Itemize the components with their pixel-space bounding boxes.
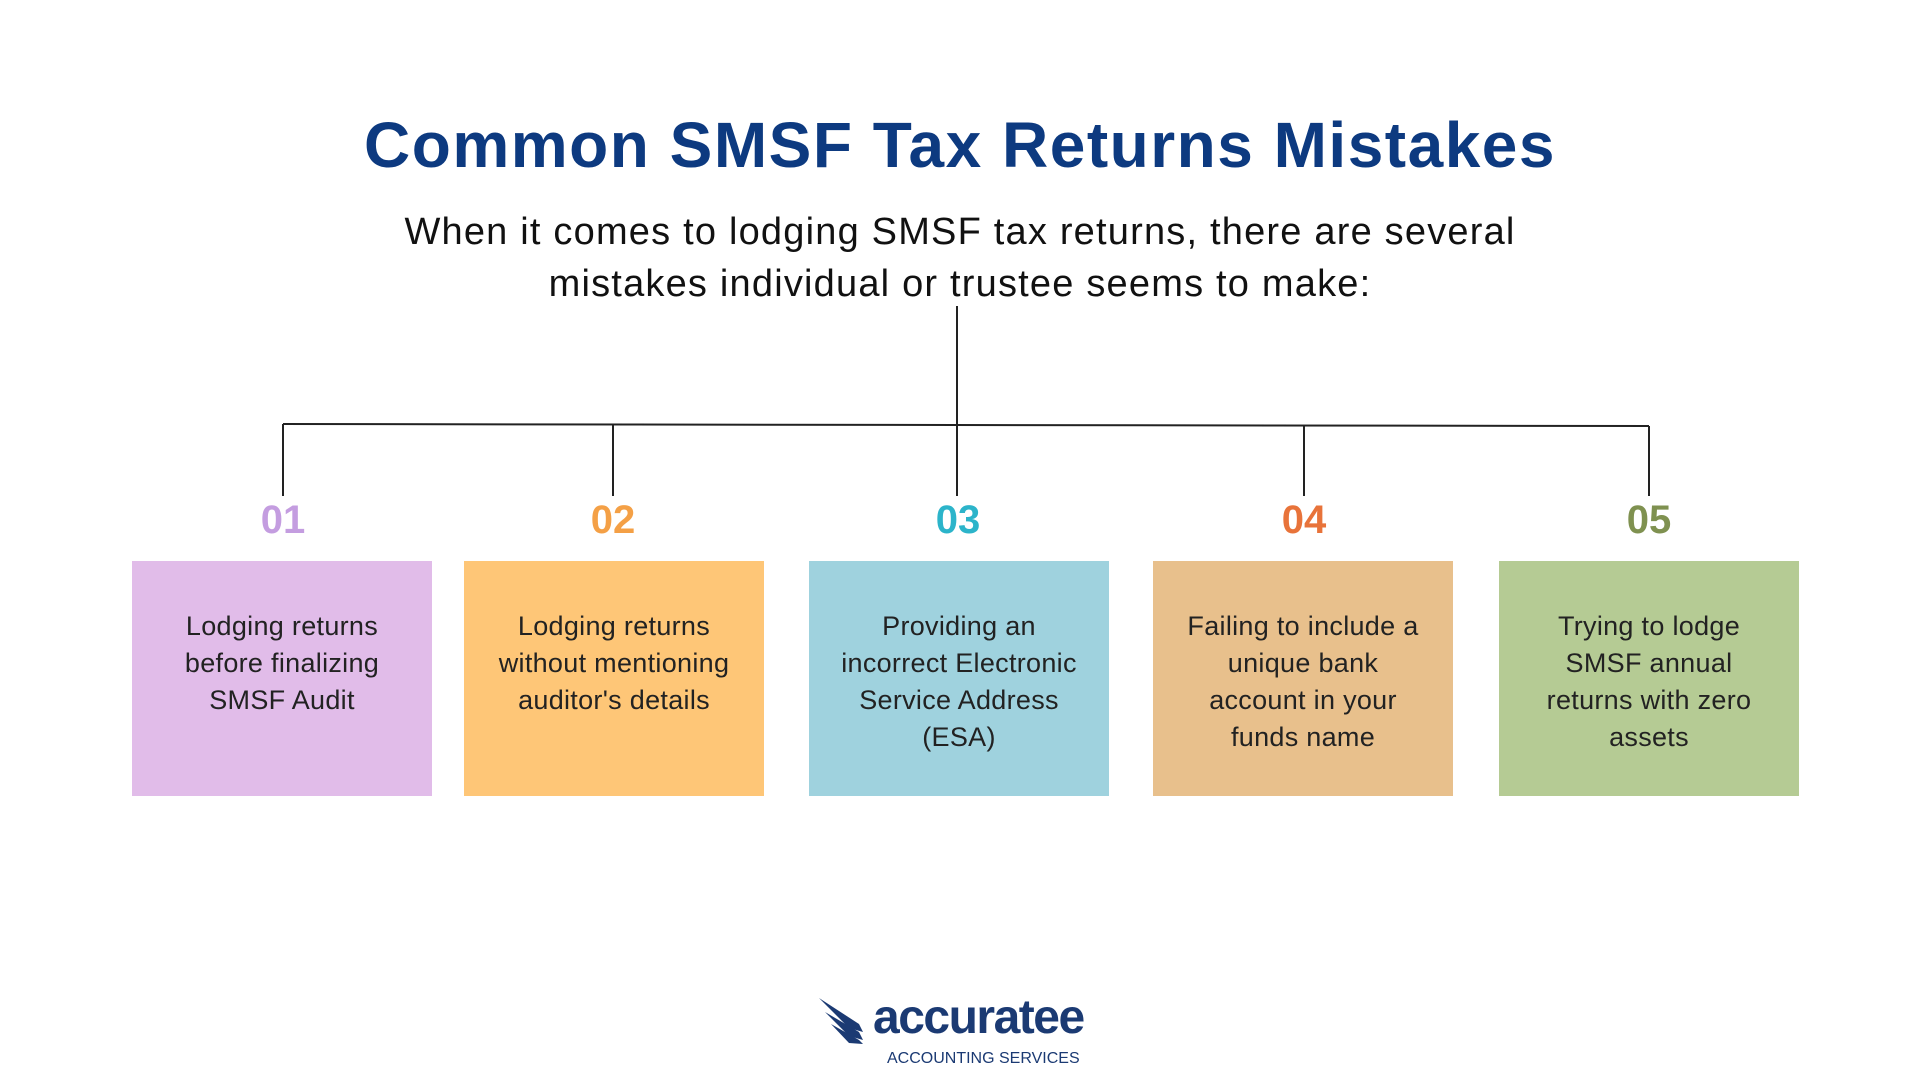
box 4: funds name [1231, 722, 1375, 752]
logo: ACCOUNTING SERVICES [887, 1050, 1080, 1067]
box 2 [464, 561, 764, 796]
number 02: 02 [591, 498, 635, 542]
box 2: Lodging returns [518, 611, 710, 641]
box 3: Service Address [859, 685, 1059, 715]
box 1: before finalizing [185, 648, 379, 678]
box 3: incorrect Electronic [841, 648, 1077, 678]
box 5: assets [1609, 722, 1689, 752]
number 04: 04 [1282, 498, 1326, 542]
box 3: Providing an [882, 611, 1036, 641]
box 1: Lodging returns [186, 611, 378, 641]
box 1 [132, 561, 432, 796]
subtitle: When it comes to lodging SMSF tax returns, there are several [404, 211, 1516, 253]
box 3: (ESA) [922, 722, 996, 752]
logo text: accuratee [873, 991, 1084, 1044]
box 4: unique bank [1228, 648, 1378, 678]
box 4: account in your [1209, 685, 1397, 715]
box 4 [1153, 561, 1453, 796]
box 1: SMSF Audit [209, 685, 355, 715]
box 2: without mentioning [499, 648, 729, 678]
box 5: returns with zero [1547, 685, 1751, 715]
box 4: Failing to include a [1187, 611, 1419, 641]
box 5: SMSF annual [1566, 648, 1732, 678]
box 2: auditor's details [518, 685, 710, 715]
box 5 [1499, 561, 1799, 796]
number 01: 01 [261, 498, 305, 542]
logo [819, 991, 1084, 1067]
subtitle: mistakes individual or trustee seems to make: [549, 263, 1371, 305]
number 05: 05 [1627, 498, 1671, 542]
number 03: 03 [936, 498, 980, 542]
icon: wings [819, 998, 863, 1044]
box 3 [809, 561, 1109, 796]
subtitle [404, 211, 1516, 305]
title: Common SMSF Tax Returns Mistakes [364, 109, 1556, 181]
box 5: Trying to lodge [1558, 611, 1740, 641]
